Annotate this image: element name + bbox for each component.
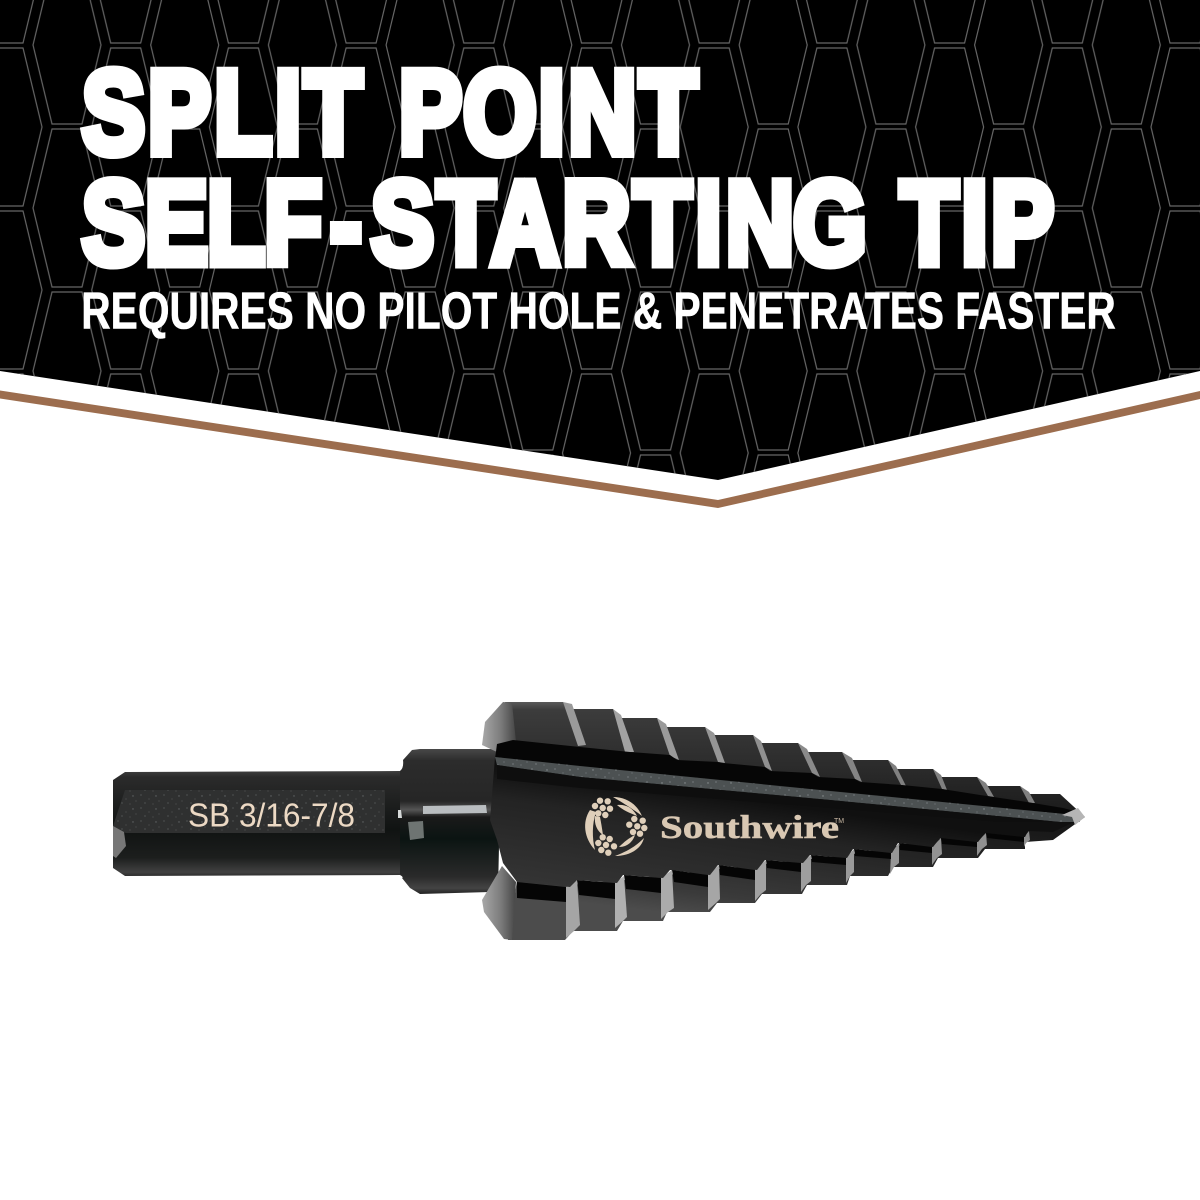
logo strand dots <box>592 798 648 856</box>
logo swooshes <box>585 797 644 856</box>
flute land strip <box>495 757 1080 822</box>
copper chevron stripe <box>0 390 1200 508</box>
flange shoulder <box>482 702 516 940</box>
Southwire wordmark: Southwire <box>660 810 839 846</box>
trademark mark: TM <box>834 818 844 825</box>
cutting face <box>490 757 1085 887</box>
tip highlight <box>1062 808 1085 825</box>
shank marking: SB 3/16-7/8 <box>188 796 355 834</box>
title line 1: SPLIT POINT <box>82 46 697 178</box>
lower black notches <box>517 833 1024 902</box>
collar <box>398 749 500 894</box>
shadow under strip <box>497 765 1060 822</box>
step drill bit <box>113 702 1085 940</box>
upper stepped flank <box>505 702 1085 817</box>
Southwire logo <box>585 797 648 856</box>
title <box>82 46 1054 289</box>
lower stepped flank <box>508 817 1085 940</box>
flute groove <box>495 740 1078 816</box>
title line 2: SELF-STARTING TIP <box>82 156 1054 289</box>
upper chamfers <box>563 702 586 746</box>
lower chamfers <box>566 880 580 938</box>
header banner with hexagon pattern <box>0 0 1200 480</box>
hex shank <box>113 768 408 880</box>
